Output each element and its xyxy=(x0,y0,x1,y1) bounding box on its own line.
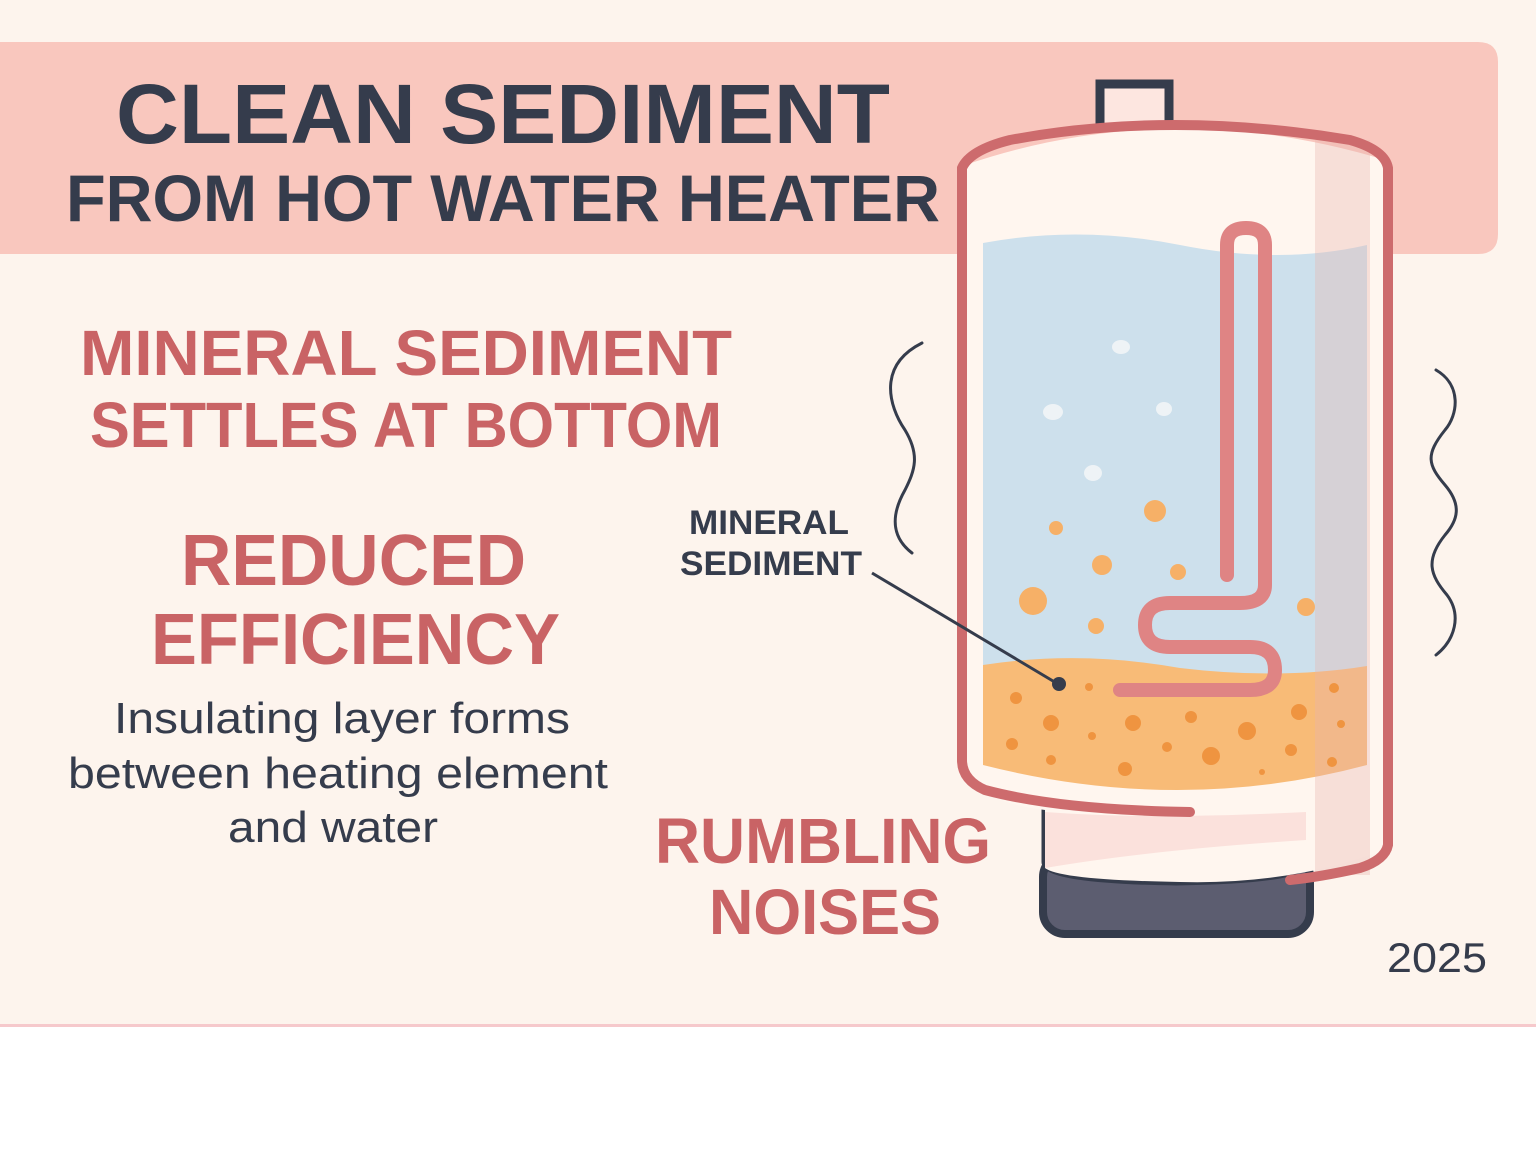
vibration lines xyxy=(891,343,1456,655)
label: mineral sediment callout: MINERAL xyxy=(689,504,849,542)
title: CLEAN SEDIMENT xyxy=(116,67,890,161)
base xyxy=(1043,855,1310,934)
heading: rumbling noises xyxy=(655,805,991,948)
heading: reduced efficiency xyxy=(151,521,560,680)
water xyxy=(983,234,1367,760)
heading: reduced efficiency: REDUCED xyxy=(181,521,526,601)
description text: Insulating layer forms xyxy=(114,694,570,743)
label: mineral sediment callout xyxy=(680,504,1066,691)
description text: between heating element xyxy=(68,749,608,798)
heating element xyxy=(1120,228,1275,690)
description text: and water xyxy=(228,803,438,852)
tank body fill xyxy=(965,129,1385,882)
heading: rumbling noises: RUMBLING xyxy=(655,805,991,877)
description text xyxy=(68,694,608,852)
heading: reduced efficiency: EFFICIENCY xyxy=(151,600,560,680)
top handle xyxy=(1100,84,1169,125)
sediment xyxy=(983,658,1367,790)
water heater illustration xyxy=(962,84,1388,934)
title banner xyxy=(0,42,1498,254)
heading: rumbling noises: NOISES xyxy=(709,876,941,948)
year: 2025 xyxy=(1387,934,1487,981)
heading: mineral sediment settles xyxy=(80,317,732,461)
title xyxy=(66,67,940,235)
heading: mineral sediment settles: MINERAL SEDIMENT xyxy=(80,317,732,389)
title: FROM HOT WATER HEATER xyxy=(66,161,940,235)
bubbles xyxy=(1043,340,1172,481)
right shading xyxy=(1315,140,1370,875)
label: mineral sediment callout: SEDIMENT xyxy=(680,545,862,583)
tank outline xyxy=(962,125,1388,880)
heading: mineral sediment settles: SETTLES AT BOTTOM xyxy=(90,389,722,461)
